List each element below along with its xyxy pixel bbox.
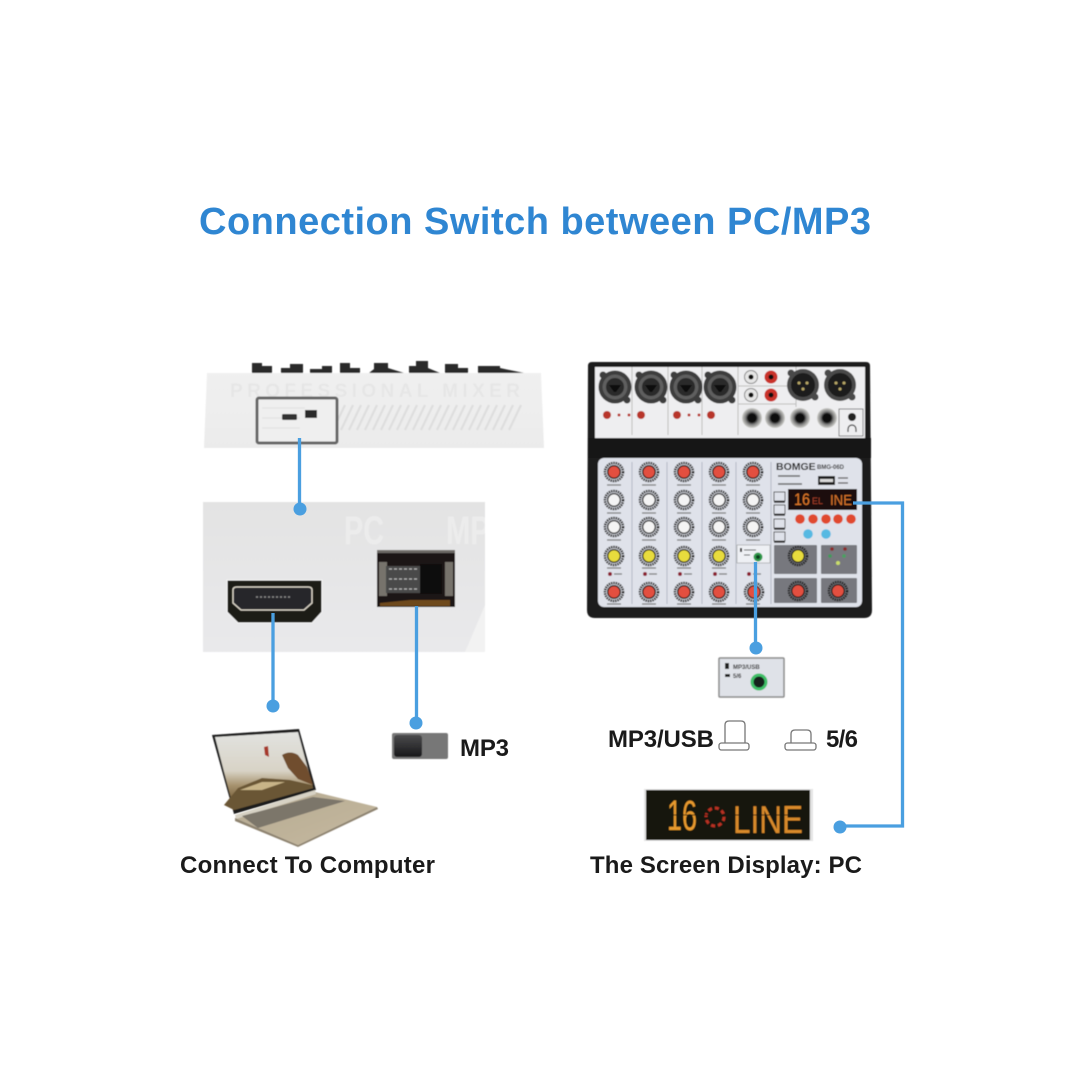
panel: LED display xyxy=(644,789,813,842)
rear panel body xyxy=(204,373,544,448)
grey blocks xyxy=(774,545,857,603)
blue buttons xyxy=(803,529,831,539)
RCA sockets xyxy=(744,370,778,402)
gain trims xyxy=(603,411,715,419)
arrow: switch to MP3 xyxy=(410,606,422,730)
icon: switch down position xyxy=(785,730,816,750)
control panel: BMG-06D xyxy=(817,465,845,471)
label: Connect To Computer: Connect To Computer xyxy=(180,852,435,879)
headphone socket xyxy=(839,409,863,436)
HDMI port xyxy=(227,580,322,623)
black divider band xyxy=(588,438,871,458)
panel: LED display: 16 xyxy=(667,792,697,840)
icon: MP3 switch xyxy=(392,733,448,759)
vent slots xyxy=(325,405,521,430)
brand: BOMGE xyxy=(776,461,816,473)
panel: mixer rear view xyxy=(204,361,544,448)
control panel: EL xyxy=(812,496,823,506)
icon: red rotating segments xyxy=(706,808,724,826)
label: MP3/USB: MP3/USB xyxy=(608,726,714,753)
red buttons xyxy=(795,514,856,524)
icon: MP3/USB input inset xyxy=(719,658,784,697)
arrow: HDMI to laptop xyxy=(266,613,280,712)
icon: switch up position xyxy=(719,721,749,750)
side legend xyxy=(774,492,785,541)
top knob silhouettes xyxy=(252,361,524,373)
label: The Screen Display: The Screen Display: PC xyxy=(590,852,862,879)
panel: LED display: LINE xyxy=(733,799,803,842)
embossed PC MP labels: PC xyxy=(344,509,384,553)
USB port xyxy=(818,476,835,485)
panel: port close-up: MP3 xyxy=(446,509,506,553)
panel: mixer top view xyxy=(587,362,872,618)
icon: laptop xyxy=(212,729,378,847)
embossed label: PROFESSIONAL MIXER xyxy=(230,381,520,402)
icon: MP3/USB input inset: MP3/USB xyxy=(733,665,760,671)
LEDs xyxy=(828,547,847,565)
arrow: input to MP3/USB inset xyxy=(750,562,762,654)
control panel xyxy=(598,458,862,607)
highlight box xyxy=(257,398,337,443)
channel knobs xyxy=(605,463,623,481)
icon: MP3/USB input inset: 5/6 xyxy=(733,674,742,680)
chassis xyxy=(587,362,872,618)
control panel: 16 xyxy=(794,490,810,509)
rear connector panel xyxy=(595,367,865,438)
slide switch xyxy=(377,550,455,607)
label: MP3: MP3 xyxy=(460,735,509,762)
arrow: screen to LED display xyxy=(834,503,902,834)
panel: port close-up xyxy=(203,502,506,652)
small switch xyxy=(305,410,317,418)
small HDMI port xyxy=(282,414,297,420)
title: Connection Switch between PC/MP3 xyxy=(199,201,871,243)
control panel: INE xyxy=(830,492,852,509)
knob captions xyxy=(607,485,761,604)
arrow: rear box to close-up xyxy=(294,438,306,516)
label: 5/6: 5/6 xyxy=(826,726,858,753)
MP3/USB input xyxy=(737,545,770,563)
screen xyxy=(788,489,857,510)
